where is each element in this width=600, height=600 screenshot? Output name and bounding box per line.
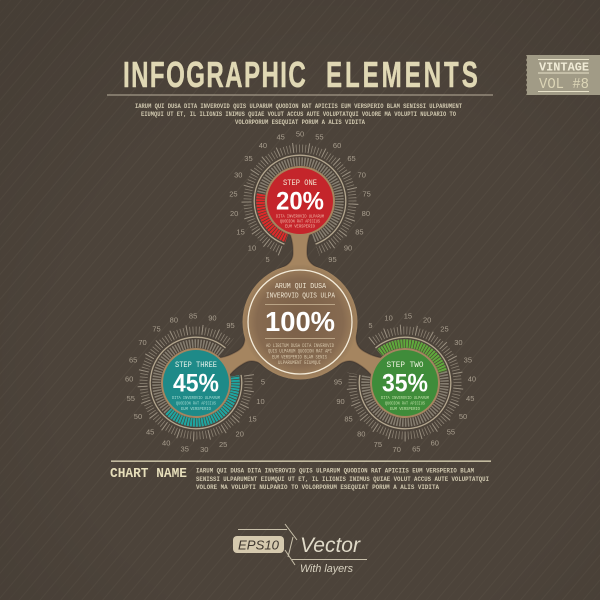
value: step three: 45% — [173, 370, 219, 398]
badge: vintage vol 8: VOL #8 — [539, 76, 589, 93]
scale labels: step one: 50 — [296, 130, 304, 139]
hub caption: EUM VERSPERIO BLAM SENIS — [272, 354, 327, 360]
caption: step one: QUODION RAT APICIUS — [280, 219, 320, 225]
caption: step two: QUODION RAT APICIUS — [385, 400, 425, 406]
scale labels: step three: 70 — [138, 338, 147, 347]
scale labels: step two: 40 — [468, 374, 476, 383]
footer text: SENISSI ULPARUMENT EIUMQUI UT ET, IL ILIGNIS INIMUS QUIAE VOLUT ACCUS AUTE VOLUPTATQUI — [196, 476, 489, 483]
hub heading: ARUM QUI DUSA — [275, 283, 326, 291]
scale labels: step two: 65 — [412, 445, 420, 454]
scale labels: step one: 20 — [230, 209, 238, 218]
scale labels: step three: 65 — [129, 355, 137, 364]
disc: step two — [372, 350, 438, 416]
scale labels: step two: 85 — [344, 415, 353, 424]
hub caption: ULPARUMENT EIUMQUI — [278, 360, 321, 366]
caption: step two — [381, 395, 429, 412]
connector stem: step two — [335, 330, 393, 389]
scale labels: step two: 10 — [384, 314, 393, 323]
caption: step one: DITA INVEROVID ULPARUM — [276, 213, 324, 219]
scale labels: step three: 10 — [256, 397, 265, 406]
scale labels: step two: 95 — [334, 377, 342, 386]
scale labels: step one: 5 — [265, 255, 270, 264]
scale labels: step one: 90 — [344, 243, 352, 252]
footer text: VOLORE MA VOLUPTI NULPARIO TO VOLORPORUM ESEQUIAT PORUM A ALIS VIDITA — [196, 484, 439, 491]
connector stem: step one — [278, 228, 322, 269]
gauge: step two — [334, 314, 476, 452]
caption: step one: EUM VERSPERIO — [285, 224, 315, 230]
hub heading: INVEROVID QUIS ULPA — [266, 292, 335, 300]
vector word: Vector — [300, 534, 361, 557]
scale labels: step three: 85 — [189, 312, 197, 321]
scale labels: step three: 95 — [226, 321, 235, 330]
scale labels: step three: 60 — [125, 374, 133, 383]
scale labels: step one: 40 — [259, 141, 267, 150]
title — [123, 54, 478, 95]
gauge dial: step three — [138, 324, 254, 442]
caption: step three: DITA INVEROVID ULPARUM — [172, 395, 220, 401]
title: ELEMENTS — [326, 54, 478, 95]
intro text: IARUM QUI DUSA DITA INVEROVID QUIS ULPARUM QUODION RAT APICIIS EUM VERSPERIO BLAM SENISSI ULPARUMENT — [135, 103, 462, 110]
intro text: EIUMQUI UT ET, IL ILIGNIS INIMUS QUIAE VOLUT ACCUS AUTE VOLUPTATQUI VOLORE MA VOLUPTI NULPARIO TO — [141, 111, 456, 118]
caption: step one — [276, 213, 324, 230]
scale labels: step two: 35 — [464, 355, 472, 364]
eps10 vector logo — [233, 524, 367, 575]
chart name: CHART NAME — [110, 466, 187, 482]
scale labels: step two: 55 — [447, 427, 455, 436]
connector stem: step three — [208, 330, 266, 389]
scale labels: step three: 35 — [181, 445, 189, 454]
scale labels: step three: 45 — [146, 427, 154, 436]
scale labels: step one: 95 — [328, 255, 337, 264]
value: step two: 35% — [382, 370, 428, 398]
scale labels: step one: 45 — [276, 132, 285, 141]
heading: step two: STEP TWO — [386, 360, 424, 370]
scale labels: step three: 20 — [236, 429, 244, 438]
scale labels: step two — [334, 312, 476, 454]
scale labels: step three: 55 — [127, 394, 135, 403]
title: INFOGRAPHIC — [123, 54, 306, 95]
scale labels: step one: 65 — [347, 154, 356, 163]
badge: vintage vol 8: VINTAGE — [539, 62, 589, 74]
scale labels: step three: 15 — [248, 415, 257, 424]
hub ring — [248, 270, 352, 374]
caption: step two: EUM VERSPERIO — [390, 406, 420, 412]
scale labels: step two: 5 — [368, 321, 373, 330]
scale labels: step three: 40 — [162, 439, 170, 448]
caption: step three: QUODION RAT APICIUS — [176, 400, 216, 406]
scale labels: step two: 50 — [459, 412, 467, 421]
scale labels: step one: 60 — [333, 141, 341, 150]
scale labels: step one: 80 — [362, 209, 370, 218]
scale labels: step two: 20 — [423, 315, 431, 324]
hub disc — [242, 264, 358, 380]
caption: step three: EUM VERSPERIO — [181, 406, 211, 412]
footer text — [196, 468, 489, 491]
intro text — [135, 103, 462, 126]
scale labels: step three: 80 — [170, 315, 178, 324]
hub heading — [266, 283, 335, 300]
scale labels: step two: 15 — [404, 312, 412, 321]
footer rule — [111, 460, 491, 462]
scale labels: step one: 70 — [358, 171, 366, 180]
scale labels: step one: 30 — [234, 171, 242, 180]
hub caption: QUIS ULPARUM QUODION RAT API — [268, 349, 332, 355]
scale labels: step two: 70 — [393, 445, 401, 454]
footer text: IARUM QUI DUSA DITA INVEROVID QUIS ULPARUM QUODION RAT APICIIS EUM VERSPERIO BLAM — [196, 468, 474, 474]
badge: vintage vol 8 — [526, 55, 600, 95]
hub value: 100% — [265, 306, 335, 337]
gauge: step one — [229, 130, 371, 265]
heading: step one: STEP ONE — [283, 178, 317, 188]
intro text: VOLORPORUM ESEQUIAT PORUM A ALIS VIDITA — [235, 119, 365, 126]
gauge dial: step one — [242, 143, 358, 256]
value: step one: 20% — [276, 188, 324, 216]
eps10 vector logo: EPS10 — [238, 538, 280, 552]
central hub — [242, 264, 358, 380]
scale labels: step one: 85 — [355, 228, 364, 237]
heading: step three: STEP THREE — [175, 360, 217, 370]
scale labels: step three: 75 — [152, 324, 161, 333]
scale labels: step one: 10 — [248, 243, 256, 252]
scale labels: step three: 50 — [134, 412, 142, 421]
gauge: step three — [125, 314, 265, 452]
scale labels: step two: 80 — [357, 429, 365, 438]
disc: step one — [267, 168, 333, 234]
scale labels: step two: 60 — [431, 439, 439, 448]
gauge dial: step two — [346, 324, 464, 442]
scale labels: step one — [229, 130, 371, 264]
scale labels: step three: 5 — [261, 377, 265, 386]
scale labels: step three: 90 — [208, 314, 217, 323]
hub caption — [266, 343, 334, 366]
scale labels: step one: 55 — [315, 132, 324, 141]
scale labels: step one: 15 — [236, 228, 245, 237]
scale labels: step three: 25 — [219, 440, 227, 449]
scale labels: step two: 30 — [454, 338, 463, 347]
scale labels: step two: 25 — [440, 324, 449, 333]
eps10 badge — [233, 536, 284, 553]
logo lines — [238, 524, 367, 565]
scale labels: step three: 30 — [200, 445, 208, 454]
with layers: With layers — [300, 563, 353, 575]
scale labels: step three — [125, 312, 265, 454]
scale labels: step one: 25 — [229, 189, 238, 198]
scale labels: step two: 45 — [466, 394, 474, 403]
title rule — [107, 94, 493, 96]
scale labels: step two: 90 — [336, 397, 345, 406]
caption: step three — [172, 395, 220, 412]
scale labels: step one: 75 — [362, 189, 371, 198]
hub caption: AD LIBITUM DUSA DITA INVEROVID — [266, 343, 334, 349]
caption: step two: DITA INVEROVID ULPARUM — [381, 395, 429, 401]
disc: step three — [163, 350, 229, 416]
scale labels: step two: 75 — [374, 440, 382, 449]
scale labels: step one: 35 — [244, 154, 253, 163]
